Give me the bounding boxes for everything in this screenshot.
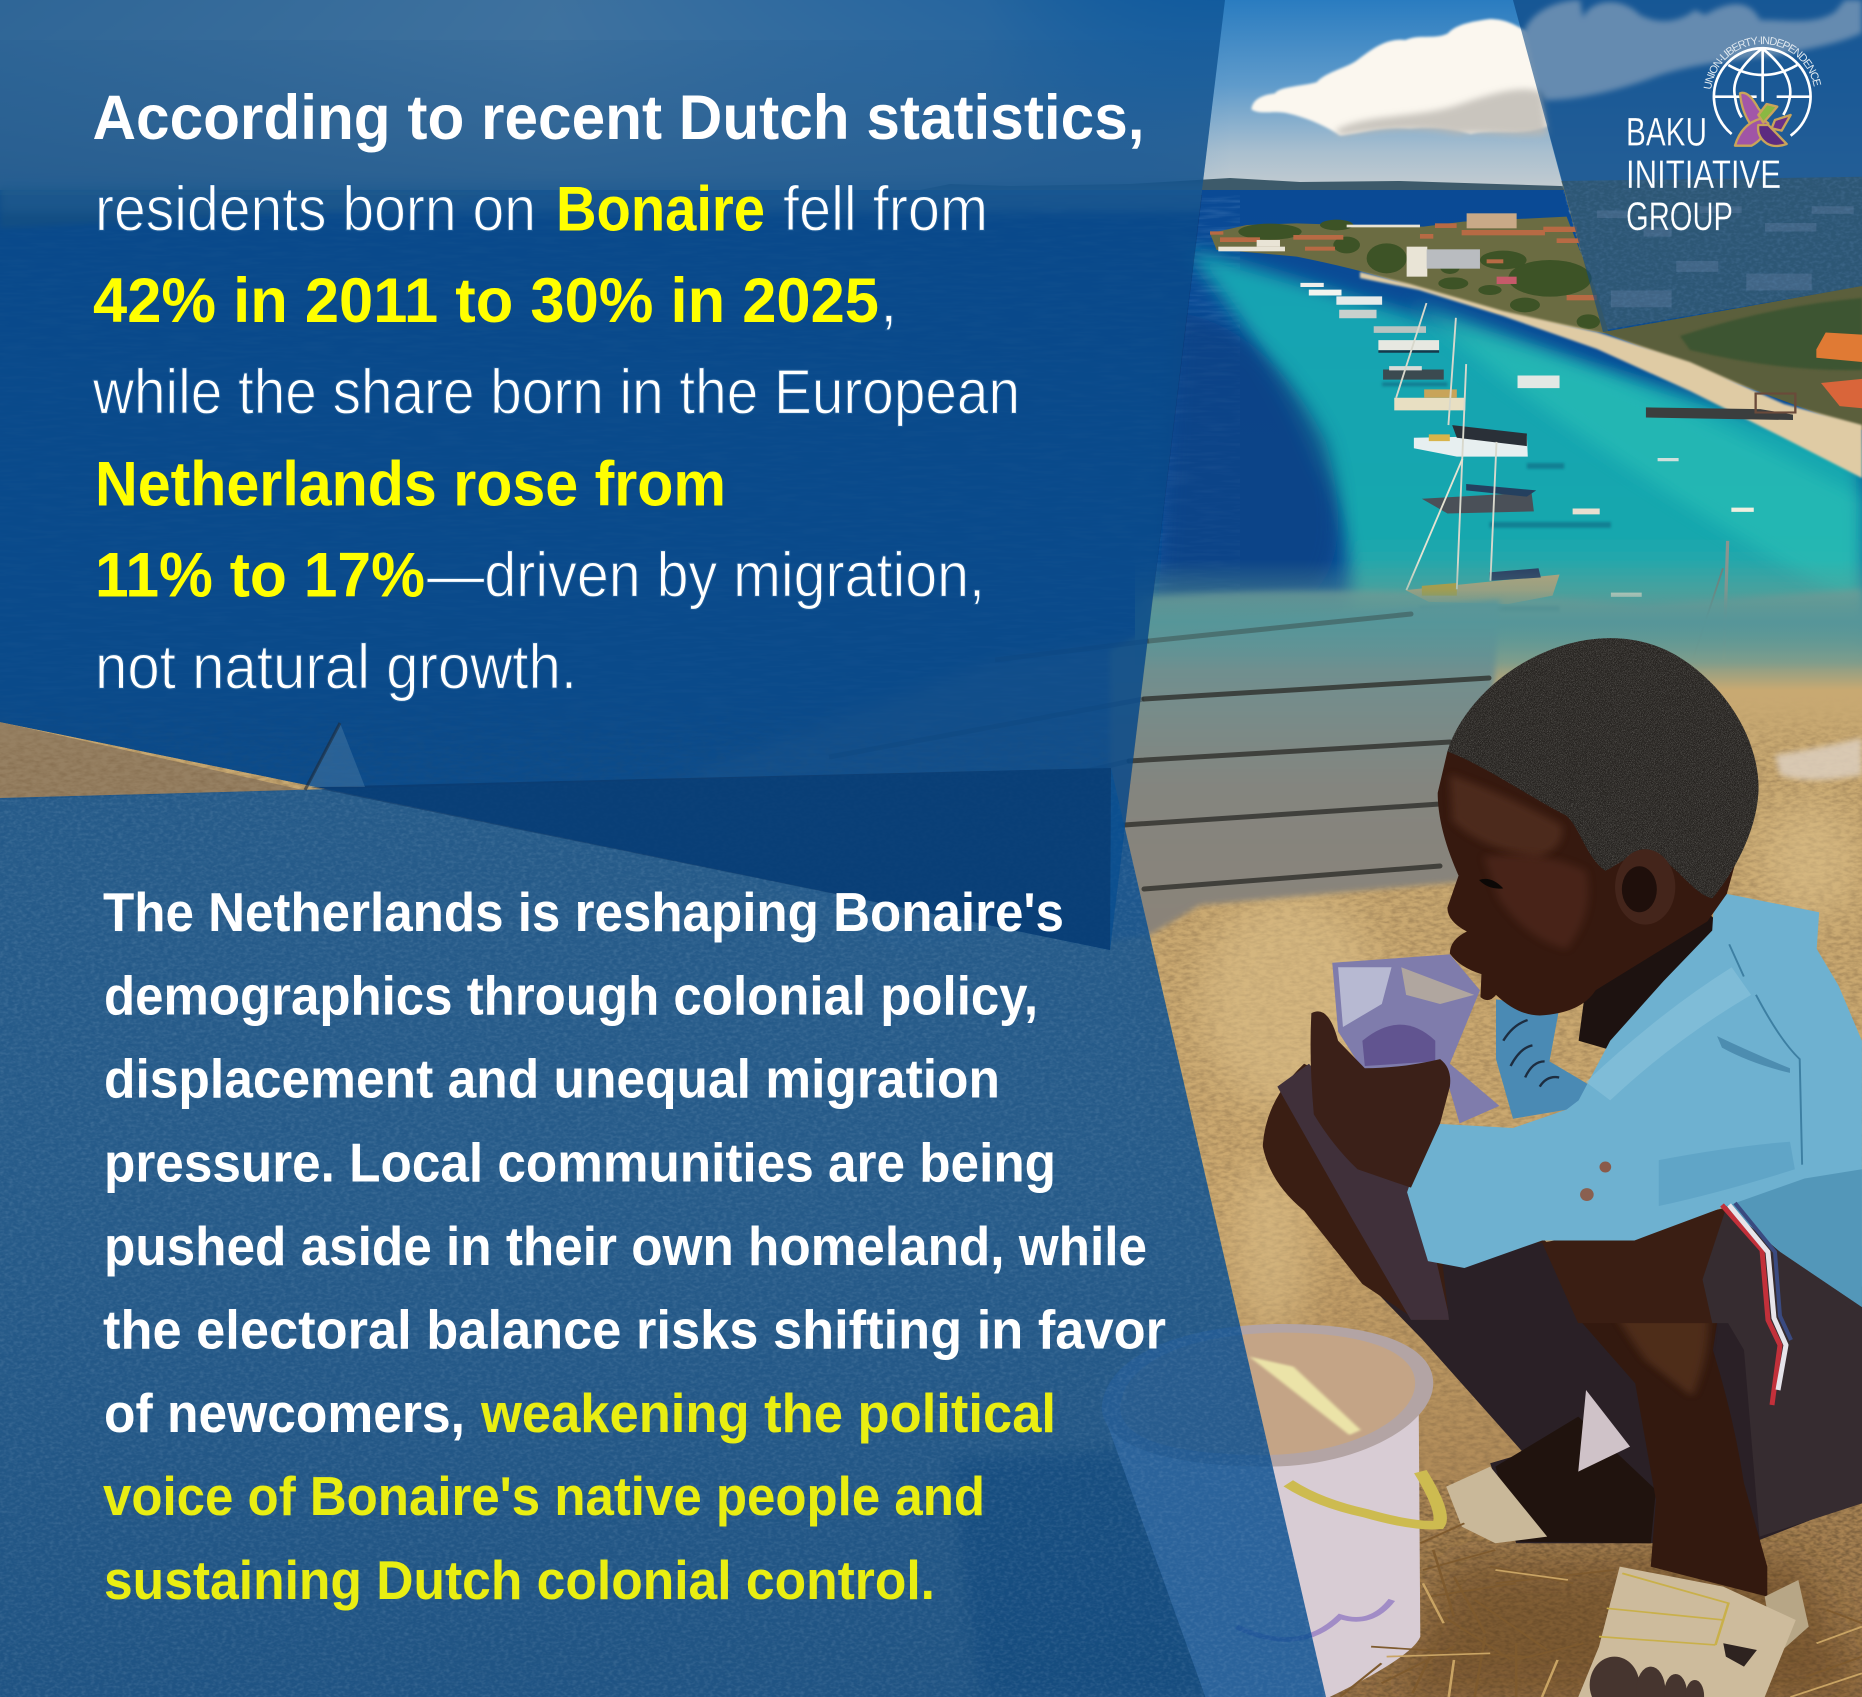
bag highlights xyxy=(1338,967,1392,1027)
back of near sandal xyxy=(1765,1580,1809,1657)
purple scribble xyxy=(1236,1600,1392,1639)
roofs xyxy=(1210,223,1597,300)
bucket xyxy=(1102,1324,1440,1697)
hay shadow patch xyxy=(1400,1560,1862,1697)
upper statistics text block xyxy=(92,83,1144,702)
head and face xyxy=(1438,646,1751,1015)
line 5: Netherlands rose from xyxy=(95,449,726,519)
ear xyxy=(1615,849,1675,925)
lower panel fibre texture xyxy=(0,768,1330,1697)
deep sky behind top-right overlay xyxy=(1513,0,1862,190)
line 9: sustaining Dutch colonial control. xyxy=(104,1549,935,1611)
sleeve end xyxy=(1418,1247,1475,1270)
strap gap xyxy=(1723,1643,1757,1667)
pier xyxy=(1646,407,1793,420)
line 1: The Netherlands is reshaping Bonaire's xyxy=(103,881,1064,943)
line 4: pressure. Local communities are being xyxy=(104,1131,1056,1193)
panel: overlap darkening xyxy=(310,768,1111,950)
shorts leg band xyxy=(1277,1064,1450,1320)
hair xyxy=(1447,638,1759,898)
front leg xyxy=(1542,1247,1767,1597)
right-hand trees xyxy=(1680,298,1862,370)
boy xyxy=(1263,628,1862,1697)
sleeve holes xyxy=(1600,1161,1611,1172)
distant hills xyxy=(900,178,1862,205)
blue shirt xyxy=(1407,892,1862,1307)
sky dimming near horizon under upper panel xyxy=(0,40,1220,190)
logo word GROUP: GROUP xyxy=(1626,195,1733,239)
sail mast line xyxy=(305,723,340,790)
logo: Baku Initiative Group xyxy=(1626,36,1822,239)
light straw stems xyxy=(1387,1570,1862,1697)
line 6 tail: —driven by migration, xyxy=(427,541,985,611)
pale buildings xyxy=(1218,213,1517,277)
icon: orchid and bird xyxy=(1735,93,1791,146)
water haze behind boy xyxy=(1135,560,1862,730)
line 7 highlight: weakening the political xyxy=(480,1382,1056,1444)
mattress seams xyxy=(1124,614,1489,889)
far town under top-right overlay xyxy=(1561,177,1862,330)
shorts stripe xyxy=(1722,1203,1791,1405)
sailboat masts xyxy=(1396,303,1728,660)
boats and houses xyxy=(1300,283,1862,660)
tree masses xyxy=(1238,220,1600,329)
water haze over mattress top xyxy=(1135,590,1862,670)
line 6 figures: 11% to 17% xyxy=(95,541,425,611)
eye xyxy=(1479,879,1503,889)
left knee and shin xyxy=(1263,1064,1566,1320)
undershirt print xyxy=(1503,1020,1559,1087)
water bag xyxy=(1332,954,1499,1123)
straw pile xyxy=(1340,1523,1862,1697)
sea ripples xyxy=(0,195,1240,785)
sky xyxy=(0,0,1862,190)
line 4: while the share born in the European xyxy=(92,358,1020,428)
sea darkening beneath the upper panel xyxy=(0,195,1202,950)
open sea xyxy=(0,190,1862,970)
headland xyxy=(1210,217,1623,337)
line 1: According to recent Dutch statistics, xyxy=(92,83,1144,153)
bucket body xyxy=(1107,1410,1420,1697)
toes xyxy=(1590,1657,1704,1697)
line 3: 42% in 2011 to 30% in 2025 xyxy=(93,266,879,336)
shirt hem xyxy=(1791,1247,1862,1287)
left headland xyxy=(0,188,520,228)
panel: upper blue overlay xyxy=(0,0,1225,950)
line 3 comma: , xyxy=(880,266,898,336)
grey hotel wing xyxy=(1427,249,1480,269)
far town mottling xyxy=(1560,177,1862,332)
turquoise shallows xyxy=(1186,248,1862,660)
hazy lower water xyxy=(1139,589,1862,660)
bucket interior xyxy=(1120,1333,1415,1455)
right cloud bank xyxy=(1520,0,1862,100)
line 6: the electoral balance risks shifting in favor xyxy=(103,1298,1166,1360)
mattress seams under panel xyxy=(829,641,1149,880)
neck xyxy=(1579,912,1727,1050)
pale lining xyxy=(1578,1390,1630,1472)
far sandal xyxy=(1446,1467,1547,1543)
icon: globe xyxy=(1714,48,1811,136)
light shaft xyxy=(1249,1357,1361,1435)
hazy left sky xyxy=(0,0,1230,190)
shorts hem xyxy=(1703,1206,1862,1323)
line 2 tail: fell from xyxy=(783,174,988,244)
yellow handle xyxy=(1288,1472,1440,1525)
continuous beach xyxy=(1360,272,1862,478)
faint sail shape in the upper panel xyxy=(307,723,365,787)
muted mattress under panel xyxy=(620,640,1140,950)
pale scrap behind boy xyxy=(1775,738,1862,780)
lower body xyxy=(1332,1247,1862,1697)
bucket rim xyxy=(1102,1324,1433,1467)
line 8: voice of Bonaire's native people and xyxy=(103,1465,985,1527)
forehead highlight xyxy=(1450,774,1562,857)
white cumulus cloud xyxy=(1251,19,1548,136)
deep water patch xyxy=(1158,311,1338,606)
logo motto: UNION·LIBERTY·INDEPENDENCE xyxy=(1704,36,1822,89)
line 3: displacement and unequal migration xyxy=(104,1048,1000,1110)
panel: lower blue overlay xyxy=(0,768,1326,1697)
moored boats xyxy=(1300,283,1754,604)
leg highlight xyxy=(1589,1263,1709,1397)
brown-grey shading in the left wedge xyxy=(0,722,303,800)
straw ground xyxy=(0,690,1862,1697)
hair grain xyxy=(1448,638,1758,898)
upper body xyxy=(1263,628,1862,1328)
logo word INITIATIVE: INITIATIVE xyxy=(1626,153,1781,197)
line 7 lead: of newcomers, xyxy=(104,1382,465,1444)
headland town xyxy=(1210,213,1623,337)
bay waters xyxy=(1139,248,1862,660)
straw texture xyxy=(0,680,1862,1697)
near arm xyxy=(1542,1208,1737,1323)
soft horizon band under the upper panel xyxy=(8,190,1202,211)
inner shin xyxy=(1495,1417,1656,1543)
coarse hay near the ground xyxy=(1200,1480,1862,1697)
shorts under sleeve xyxy=(1440,1243,1578,1328)
mattress stack xyxy=(1110,600,1500,940)
hand xyxy=(1311,1011,1450,1188)
shirt shading xyxy=(1727,1169,1862,1307)
line 2: demographics through colonial policy, xyxy=(104,964,1038,1026)
sandal strap stitching xyxy=(1599,1573,1728,1645)
lower explanatory text block xyxy=(103,881,1166,1611)
boat shadows xyxy=(1382,382,1611,612)
sunlit straw patches xyxy=(1200,800,1860,1340)
line 2 lead: residents born on xyxy=(95,174,536,244)
line 7: not natural growth. xyxy=(95,632,577,702)
cheek highlight xyxy=(1484,854,1588,949)
right-hand orange houses xyxy=(1816,333,1862,362)
printed undershirt xyxy=(1496,999,1588,1119)
near sandal xyxy=(1578,1567,1796,1697)
panel: top-right blue overlay xyxy=(1513,0,1862,332)
ground shadow xyxy=(950,1440,1330,1697)
shorts right side xyxy=(1703,1247,1862,1537)
shorts and back leg xyxy=(1332,1247,1862,1543)
line 5: pushed aside in their own homeland, while xyxy=(104,1215,1147,1277)
lighter shore water xyxy=(1410,303,1862,610)
right-hand hillside xyxy=(1603,286,1862,430)
shirt seam xyxy=(1729,944,1802,1165)
line 2 Bonaire: Bonaire xyxy=(556,174,765,244)
logo word BAKU: BAKU xyxy=(1626,110,1707,154)
